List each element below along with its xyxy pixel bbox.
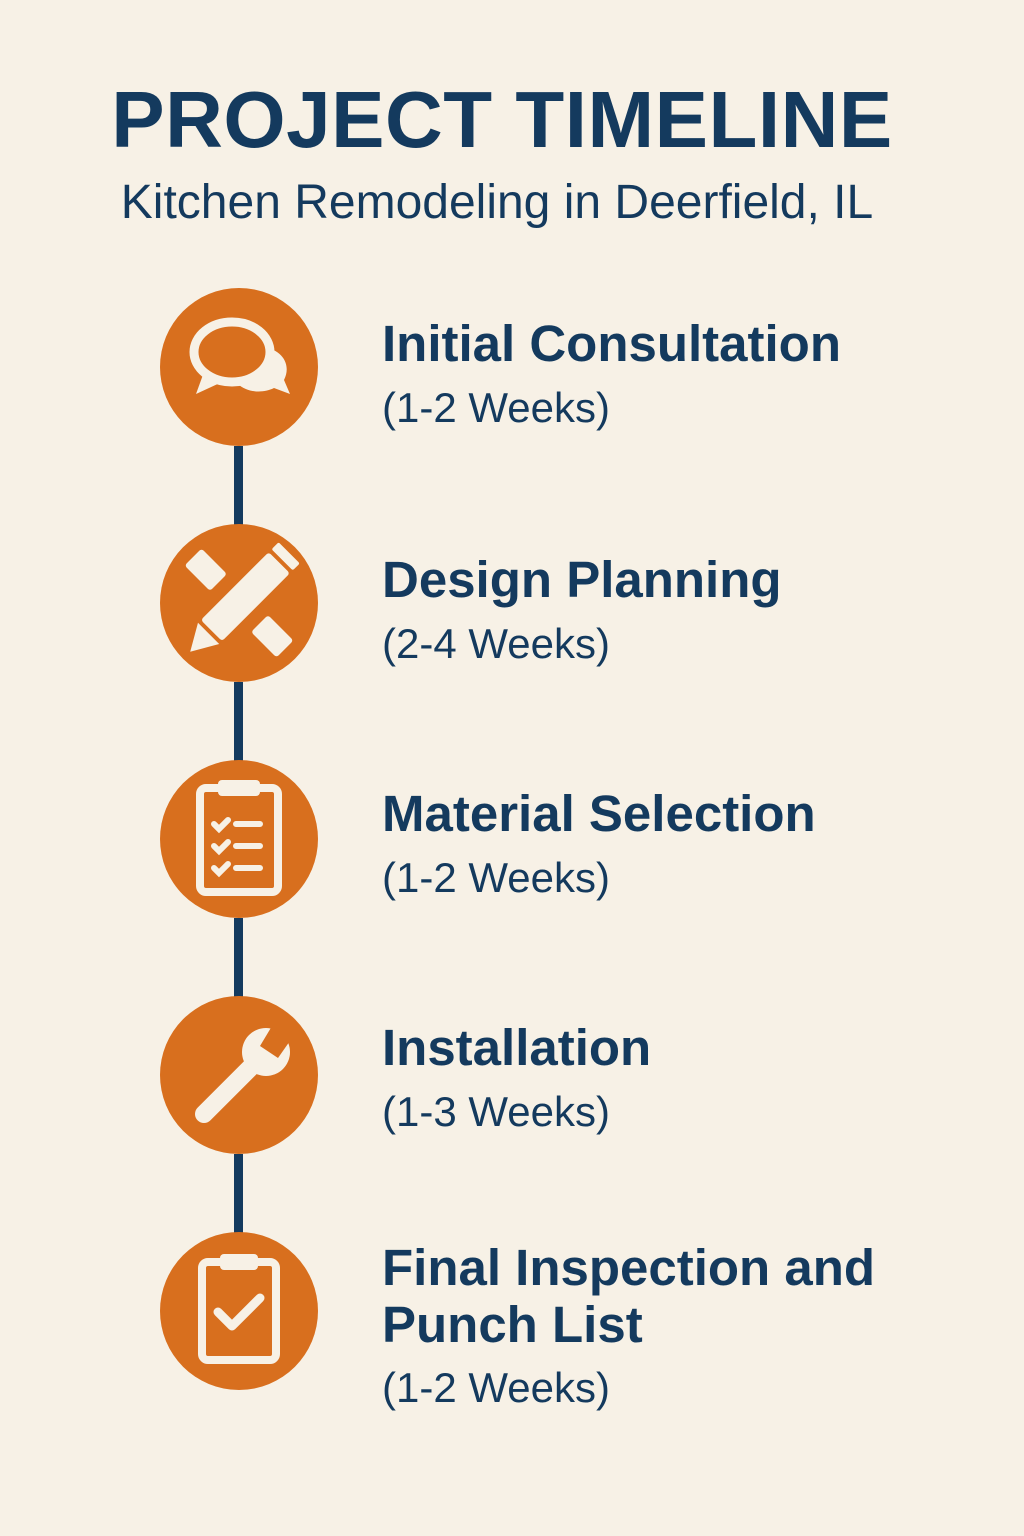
icon: wrench (160, 996, 318, 1154)
step 4 text: Installation (382, 1019, 651, 1076)
icon: checklist clipboard (160, 760, 318, 918)
connector lines (234, 446, 243, 1232)
step 5 text: Final Inspection and (382, 1239, 875, 1296)
step 1 text: Initial Consultation (382, 315, 841, 372)
step 3 text: Material Selection (382, 785, 816, 842)
text: (1-2 Weeks) (382, 1364, 610, 1411)
icon: chat bubbles (160, 288, 318, 446)
icon: pencil and ruler (160, 524, 318, 682)
text: (1-2 Weeks) (382, 384, 610, 431)
title: PROJECT TIMELINE (111, 75, 893, 164)
step 5 text: Punch List (382, 1296, 643, 1353)
icon: check clipboard (160, 1232, 318, 1390)
text: (2-4 Weeks) (382, 620, 610, 667)
text: (1-2 Weeks) (382, 854, 610, 901)
text: (1-3 Weeks) (382, 1088, 610, 1135)
step 5 text (382, 1239, 875, 1353)
subtitle: Kitchen Remodeling in Deerfield, IL (121, 176, 873, 229)
step 2 text: Design Planning (382, 551, 782, 608)
